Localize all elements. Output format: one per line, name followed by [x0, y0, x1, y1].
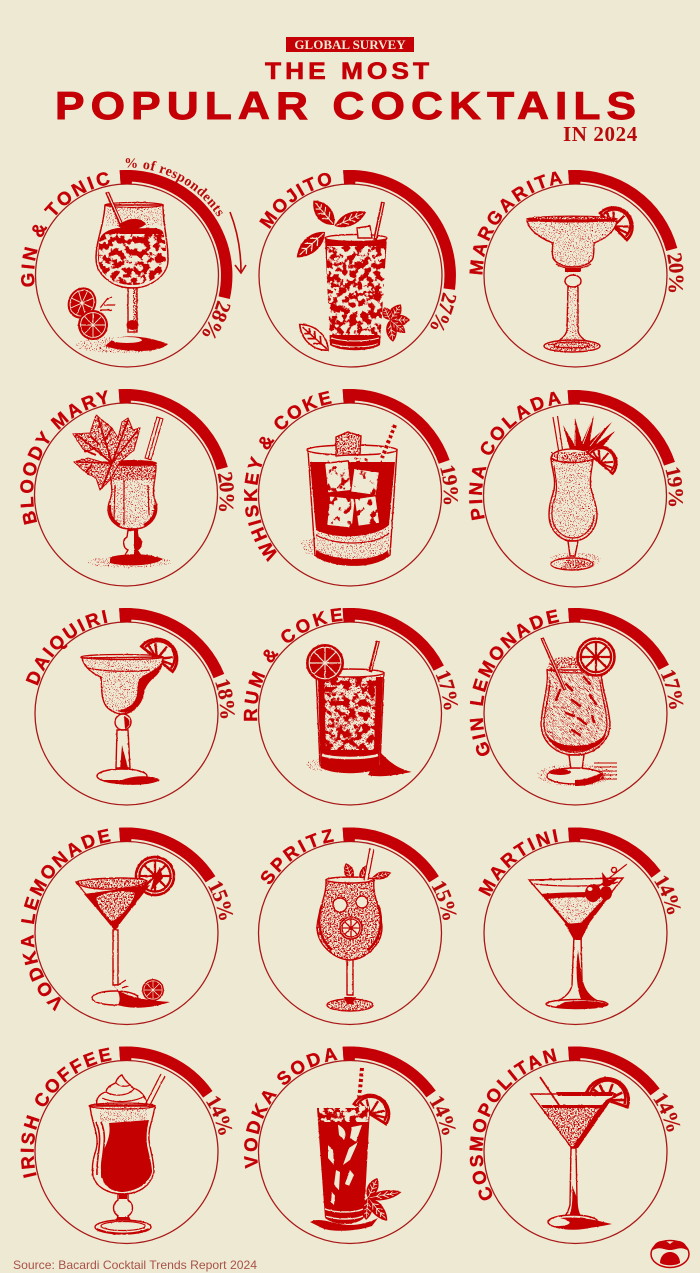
ring and label: VODKA SODA [244, 1048, 338, 1169]
illustration: gin lemonade glass [537, 638, 617, 786]
ring and label: 27% [430, 292, 456, 331]
illustration: vodka lemonade glass [76, 857, 174, 1008]
card: cosmopolitan [469, 1046, 680, 1244]
badge: global survey: GLOBAL SURVEY [294, 37, 406, 52]
ring and label [478, 828, 681, 1026]
card: rum & coke [244, 608, 458, 806]
card: mojito [258, 170, 456, 368]
ring and label: 14% [430, 1096, 456, 1135]
title: popular cocktails: POPULAR COCKTAILS [55, 84, 642, 127]
ring and label: MARTINI [478, 829, 558, 896]
ring and label: 20% [218, 472, 234, 512]
ring and label: MOJITO [259, 172, 332, 229]
card: spritz [258, 828, 457, 1026]
ring and label: 14% [206, 1096, 232, 1135]
illustration: cosmopolitan glass [531, 1073, 634, 1229]
ring and label: 19% [440, 466, 458, 504]
ring and label: IRISH COFFEE [20, 1048, 112, 1178]
ring and label: DAIQUIRI [26, 610, 108, 686]
ring and label [468, 390, 684, 588]
ring and label [21, 170, 232, 368]
header [55, 37, 642, 146]
ring and label: PINA COLADA [468, 392, 562, 520]
ring and label: WHISKEY & COKE [244, 390, 332, 562]
illustration: martini glass [529, 864, 627, 1009]
ring and label [469, 1046, 680, 1244]
ring and label: 14% [654, 876, 681, 914]
ring and label: 14% [653, 1093, 680, 1132]
ring and label [20, 828, 234, 1026]
card: vodka lemonade [20, 828, 234, 1026]
card: margarita [469, 170, 684, 368]
card: daiquiri [26, 608, 235, 806]
card: vodka soda [244, 1046, 456, 1244]
ring and label: 20% [667, 253, 684, 292]
ring and label [258, 170, 456, 368]
card: irish coffee [20, 1046, 232, 1244]
card: martini [478, 828, 681, 1026]
card: gin lemonade [470, 608, 684, 806]
illustration: gin and tonic glass [63, 192, 168, 353]
ring and label: 18% [215, 679, 235, 718]
ring and label [20, 1046, 232, 1244]
ring and label: 17% [660, 670, 684, 709]
illustration: daiquiri glass [81, 631, 185, 785]
ring and label [244, 1046, 456, 1244]
ring and label: 15% [432, 881, 457, 920]
ring and label: 17% [436, 670, 458, 710]
illustration: pina colada glass [549, 415, 623, 570]
ring and label [244, 389, 458, 587]
ring and label: BLOODY MARY [20, 390, 108, 525]
card: pina colada [468, 390, 684, 588]
illustration: bloody mary glass [73, 415, 172, 568]
ring and label: 28% [202, 300, 230, 339]
title: the most: THE MOST [265, 58, 433, 85]
ring and label: GIN LEMONADE [470, 609, 560, 756]
illustration: irish coffee glass [89, 1074, 165, 1234]
ring and label: 19% [666, 467, 684, 506]
source note: Source: Bacardi Cocktail Trends Report 2024 [13, 1258, 257, 1272]
ring and label: COSMOPOLITAN [469, 1048, 557, 1200]
illustration: spritz glass [317, 848, 392, 1011]
ring and label: MARGARITA [469, 172, 563, 275]
illustration: whiskey glass [300, 425, 397, 566]
ring and label: GIN & TONIC [21, 172, 110, 287]
illustration: rum and coke glass [305, 641, 412, 776]
ring and label: VODKA LEMONADE [20, 828, 111, 1012]
logo [651, 1240, 689, 1268]
ring and label [20, 389, 234, 587]
illustration: mojito glass [291, 195, 410, 356]
card: gin & tonic [21, 170, 232, 368]
axis note: percent of respondents [126, 158, 247, 274]
illustration: margarita glass [526, 200, 640, 352]
ring and label [469, 170, 684, 368]
ring and label [26, 608, 235, 806]
ring and label [258, 828, 457, 1026]
ring and label: 15% [208, 881, 234, 920]
axis note: percent of respondents: % of respondents [126, 158, 223, 216]
ring and label [470, 608, 684, 806]
arrow [230, 212, 246, 273]
ring and label: SPRITZ [260, 828, 334, 884]
card: bloody mary [20, 389, 234, 587]
ring and label: RUM & COKE [244, 608, 343, 721]
subtitle: in 2024: IN 2024 [563, 122, 638, 146]
card: whiskey & coke [244, 389, 458, 587]
ring and label [244, 608, 458, 806]
illustration: vodka soda glass [310, 1068, 402, 1231]
